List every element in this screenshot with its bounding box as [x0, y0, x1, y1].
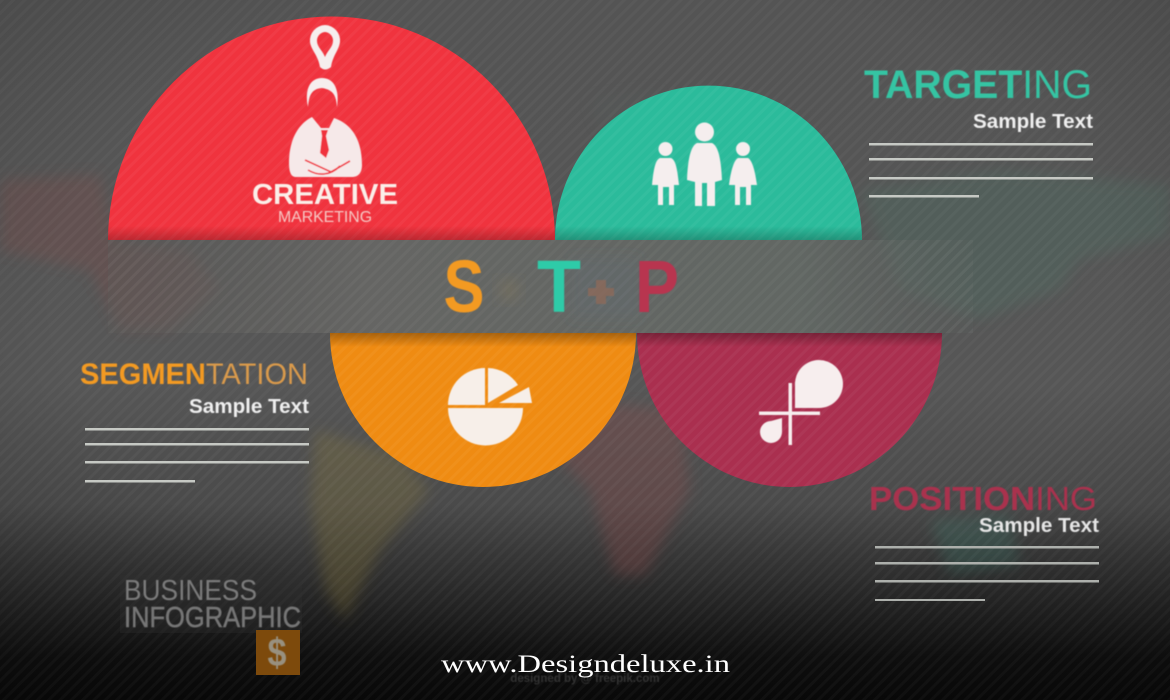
heading: targeting: TARGETING [864, 63, 1092, 107]
faint world map [0, 90, 1170, 620]
logo: business infographic: $ [268, 631, 286, 675]
semicircle: crimson positioning [637, 333, 942, 487]
semicircle: orange segmentation [330, 333, 636, 487]
label: creative marketing: CREATIVE [252, 179, 398, 211]
subheading: segmentation: Sample Text [189, 396, 309, 418]
heading: segmentation: SEGMENTATION [80, 358, 308, 391]
semicircle: red creative marketing [108, 16, 555, 240]
text lines: positioning [875, 546, 1099, 601]
logo: business infographic [120, 575, 302, 675]
band: STP [108, 240, 973, 333]
heading: positioning: POSITION ING [869, 480, 1097, 517]
subheading: targeting: Sample Text [973, 111, 1093, 133]
watermark url: www.Designdeluxe.in [441, 651, 731, 678]
icon: positioning drops and cross [759, 360, 843, 445]
letter P: P [635, 245, 679, 328]
icon: pie chart [448, 368, 532, 446]
text lines: targeting [869, 143, 1093, 198]
logo: business infographic: BUSINESS [124, 575, 257, 607]
icon: light bulb [310, 25, 340, 70]
letter T: T [537, 245, 581, 328]
semicircle: teal targeting [555, 86, 862, 240]
text lines: segmentation [85, 428, 309, 482]
letter S: S [444, 245, 484, 328]
credit: designed by freepik: designed by @ freepik.com [510, 673, 660, 685]
label: creative marketing: MARKETING [278, 209, 372, 226]
subheading: positioning: Sample Text [979, 515, 1099, 537]
icon: businessman with crossed arms [289, 78, 362, 177]
logo: business infographic: INFOGRAPHIC [124, 602, 301, 634]
label: creative marketing [252, 179, 398, 226]
icon: family of three [652, 122, 757, 206]
